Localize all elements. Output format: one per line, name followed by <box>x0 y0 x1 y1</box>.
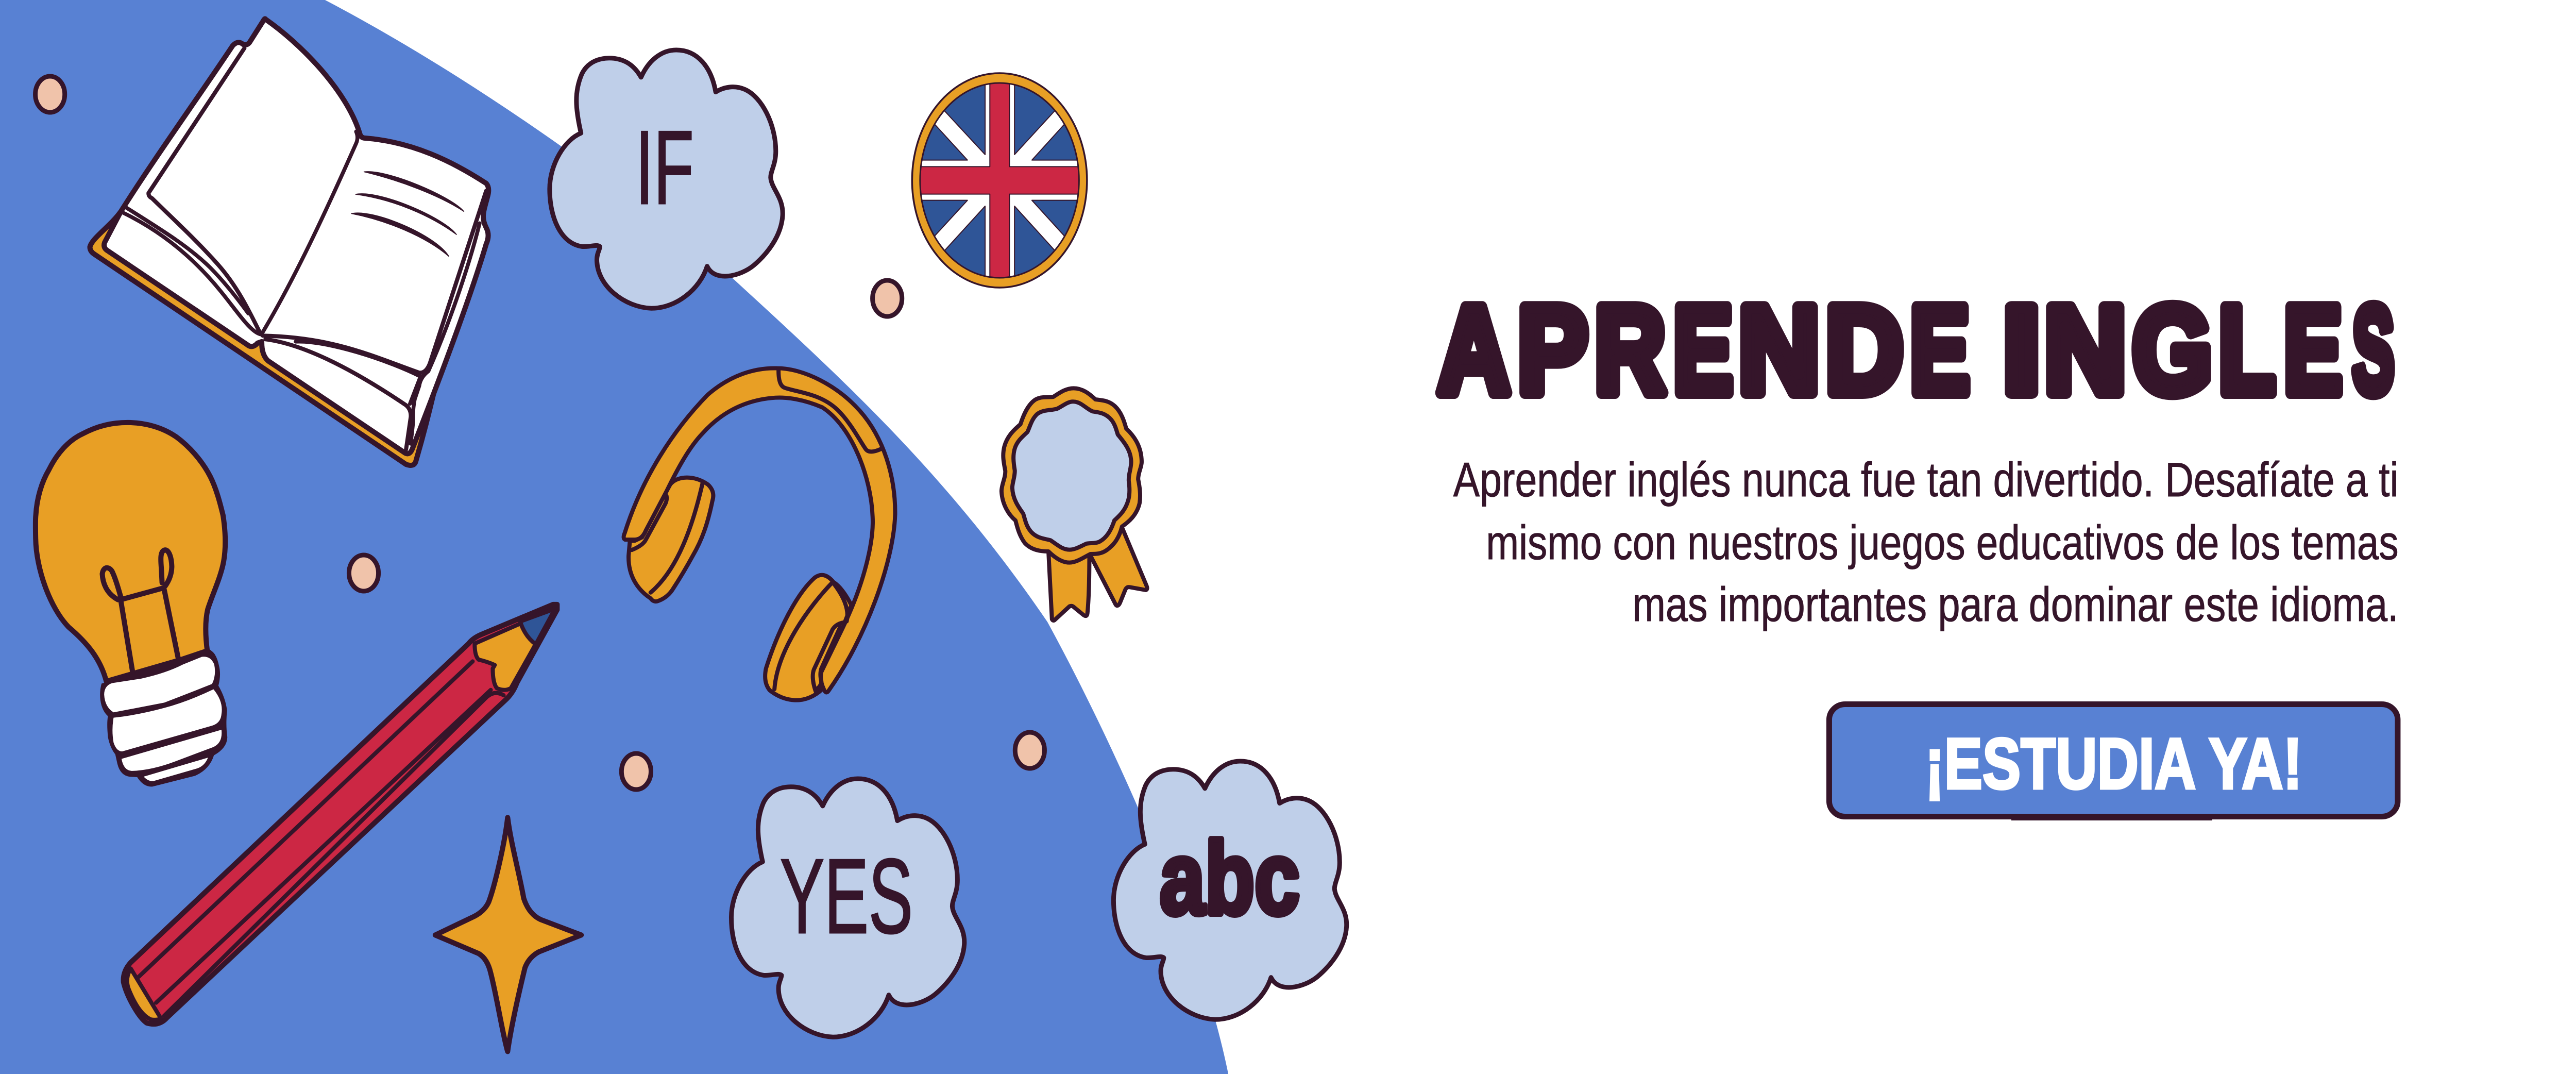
decorative pink dots <box>36 76 1044 790</box>
icon: light bulb <box>36 423 227 786</box>
title: P <box>1518 280 1588 419</box>
title: G <box>2132 280 2212 419</box>
speech cloud: abc: abc <box>1160 820 1300 936</box>
title: S <box>2352 280 2394 419</box>
speech cloud: IF <box>550 50 783 308</box>
icon: headphones <box>624 368 895 700</box>
icon: red pencil <box>124 605 557 1024</box>
speech cloud: IF: IF <box>635 109 694 226</box>
title: R <box>1595 280 1666 419</box>
title: E <box>2284 280 2342 419</box>
icon: UK flag badge <box>912 73 1087 288</box>
title: D <box>1825 280 1903 419</box>
icon: orange sparkle star <box>435 817 581 1051</box>
title: L <box>2218 280 2275 419</box>
title: I <box>2003 280 2041 419</box>
description text: Aprender inglés nunca fue tan divertido. Desafíate a ti <box>1453 453 2399 507</box>
title: A <box>1438 280 1510 419</box>
call to action button <box>1829 704 2398 820</box>
blue curved background panel <box>0 0 1228 1074</box>
title: E <box>1673 280 1733 419</box>
title: E <box>1910 280 1970 419</box>
description text: mas importantes para dominar este idioma. <box>1632 578 2399 632</box>
icon: medal rosette <box>1002 388 1147 620</box>
call to action button: ¡ESTUDIA YA! <box>1925 724 2302 804</box>
title: N <box>2044 280 2126 419</box>
title: N <box>1738 280 1820 419</box>
speech cloud: abc <box>1113 761 1347 1019</box>
description text <box>1453 453 2399 632</box>
speech cloud: YES <box>731 779 964 1037</box>
speech cloud: YES: YES <box>780 837 913 955</box>
icon: open book <box>90 19 488 465</box>
description text: mismo con nuestros juegos educativos de los temas <box>1486 516 2399 570</box>
